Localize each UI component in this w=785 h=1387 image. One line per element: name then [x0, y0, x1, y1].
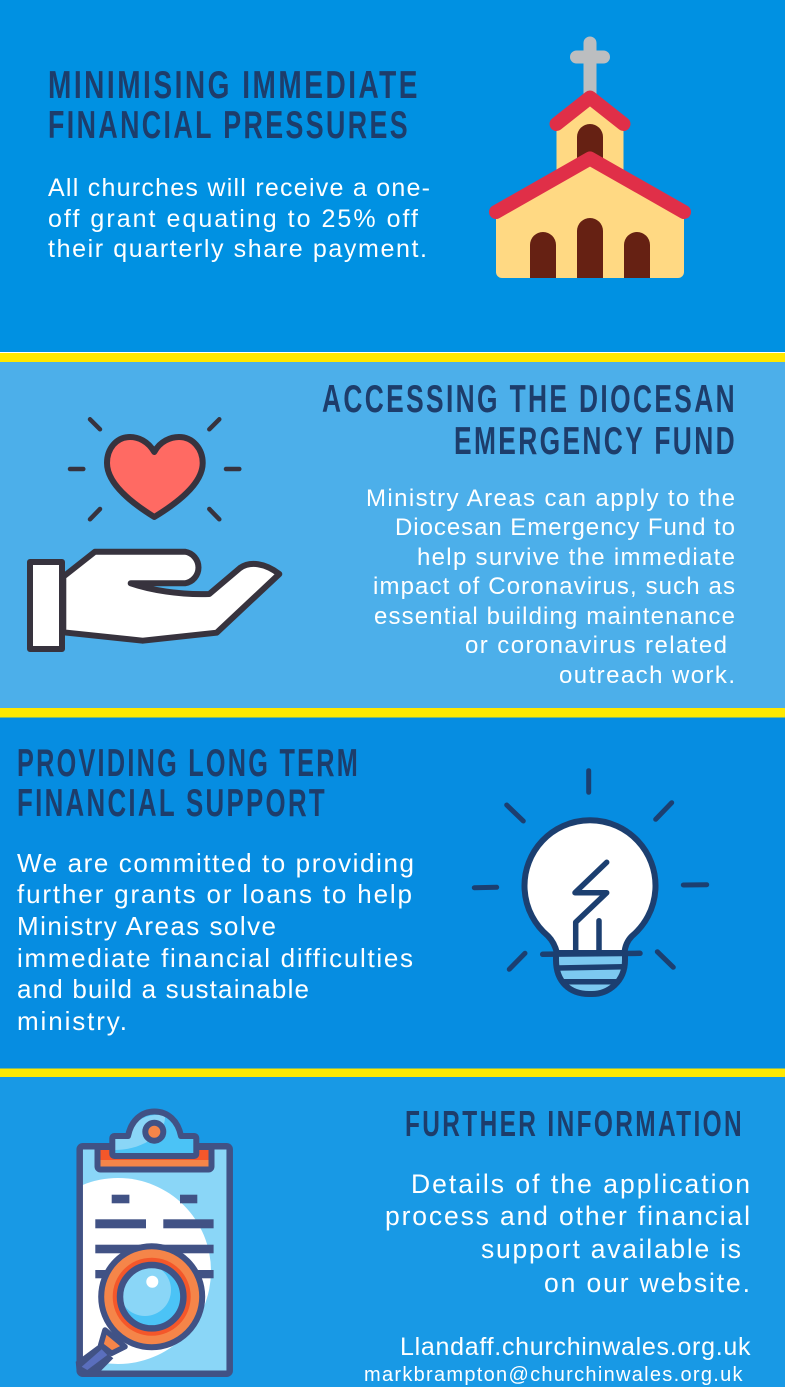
heading: minimising immediate financial pressures: FINANCIAL PRESSURES [48, 104, 410, 147]
panel: providing long term financial support [0, 718, 785, 1068]
text block: emergency fund details: or coronavirus related [465, 632, 728, 659]
text block: emergency fund details: outreach work. [559, 662, 736, 689]
icon: light bulb [474, 771, 707, 994]
heading: minimising immediate financial pressures [48, 64, 420, 147]
heading: minimising immediate financial pressures: MINIMISING IMMEDIATE [48, 64, 420, 107]
text block: grants or loans: ministry. [17, 1006, 128, 1036]
text block: emergency fund details [366, 485, 736, 689]
icon: church [496, 43, 684, 278]
text block: emergency fund details: help survive the immediate [417, 544, 736, 571]
heading: providing long term financial support: PROVIDING LONG TERM [17, 742, 360, 785]
divider band three [0, 1068, 785, 1077]
text block: emergency fund details: Diocesan Emergency Fund to [395, 514, 736, 541]
icon: hand holding heart [30, 419, 279, 649]
text block: application details: Details of the application [411, 1169, 752, 1199]
panel: further information [0, 1077, 785, 1387]
heading: accessing the diocesan emergency fund [322, 378, 737, 463]
text block: one-off grant [48, 174, 432, 263]
text block: grants or loans: further grants or loans to help [17, 879, 414, 909]
heading: providing long term financial support: FINANCIAL SUPPORT [17, 782, 327, 825]
text block: application details: on our website. [544, 1268, 752, 1298]
text block: emergency fund details: Ministry Areas can apply to the [366, 485, 736, 512]
icon: clipboard with magnifying glass [76, 1108, 233, 1377]
text block: grants or loans: and build a sustainable [17, 974, 310, 1004]
text block: application details: support available is [481, 1234, 742, 1264]
text block: one-off grant: All churches will receive a one- [48, 174, 432, 202]
text block: grants or loans: We are committed to providing [17, 848, 416, 878]
text block: application details: process and other financial [385, 1201, 752, 1231]
text: website address: Llandaff.churchinwales.org.uk [400, 1333, 752, 1361]
divider band one [0, 352, 785, 362]
text block: grants or loans [17, 848, 416, 1036]
text block: grants or loans: immediate financial difficulties [17, 943, 414, 973]
divider band two [0, 708, 785, 718]
text block: application details [385, 1169, 752, 1298]
text block: emergency fund details: essential building maintenance [374, 603, 736, 630]
panel: minimising immediate financial pressures [0, 0, 785, 352]
text block: grants or loans: Ministry Areas solve [17, 911, 278, 941]
text block: one-off grant: their quarterly share payment. [48, 235, 428, 263]
text block: one-off grant: off grant equating to 25% off [48, 205, 420, 233]
heading: providing long term financial support [17, 742, 360, 825]
panel: accessing the diocesan emergency fund [0, 362, 785, 708]
text: email address: markbrampton@churchinwales.org.uk [364, 1364, 744, 1386]
text block: emergency fund details: impact of Coronavirus, such as [373, 573, 736, 600]
